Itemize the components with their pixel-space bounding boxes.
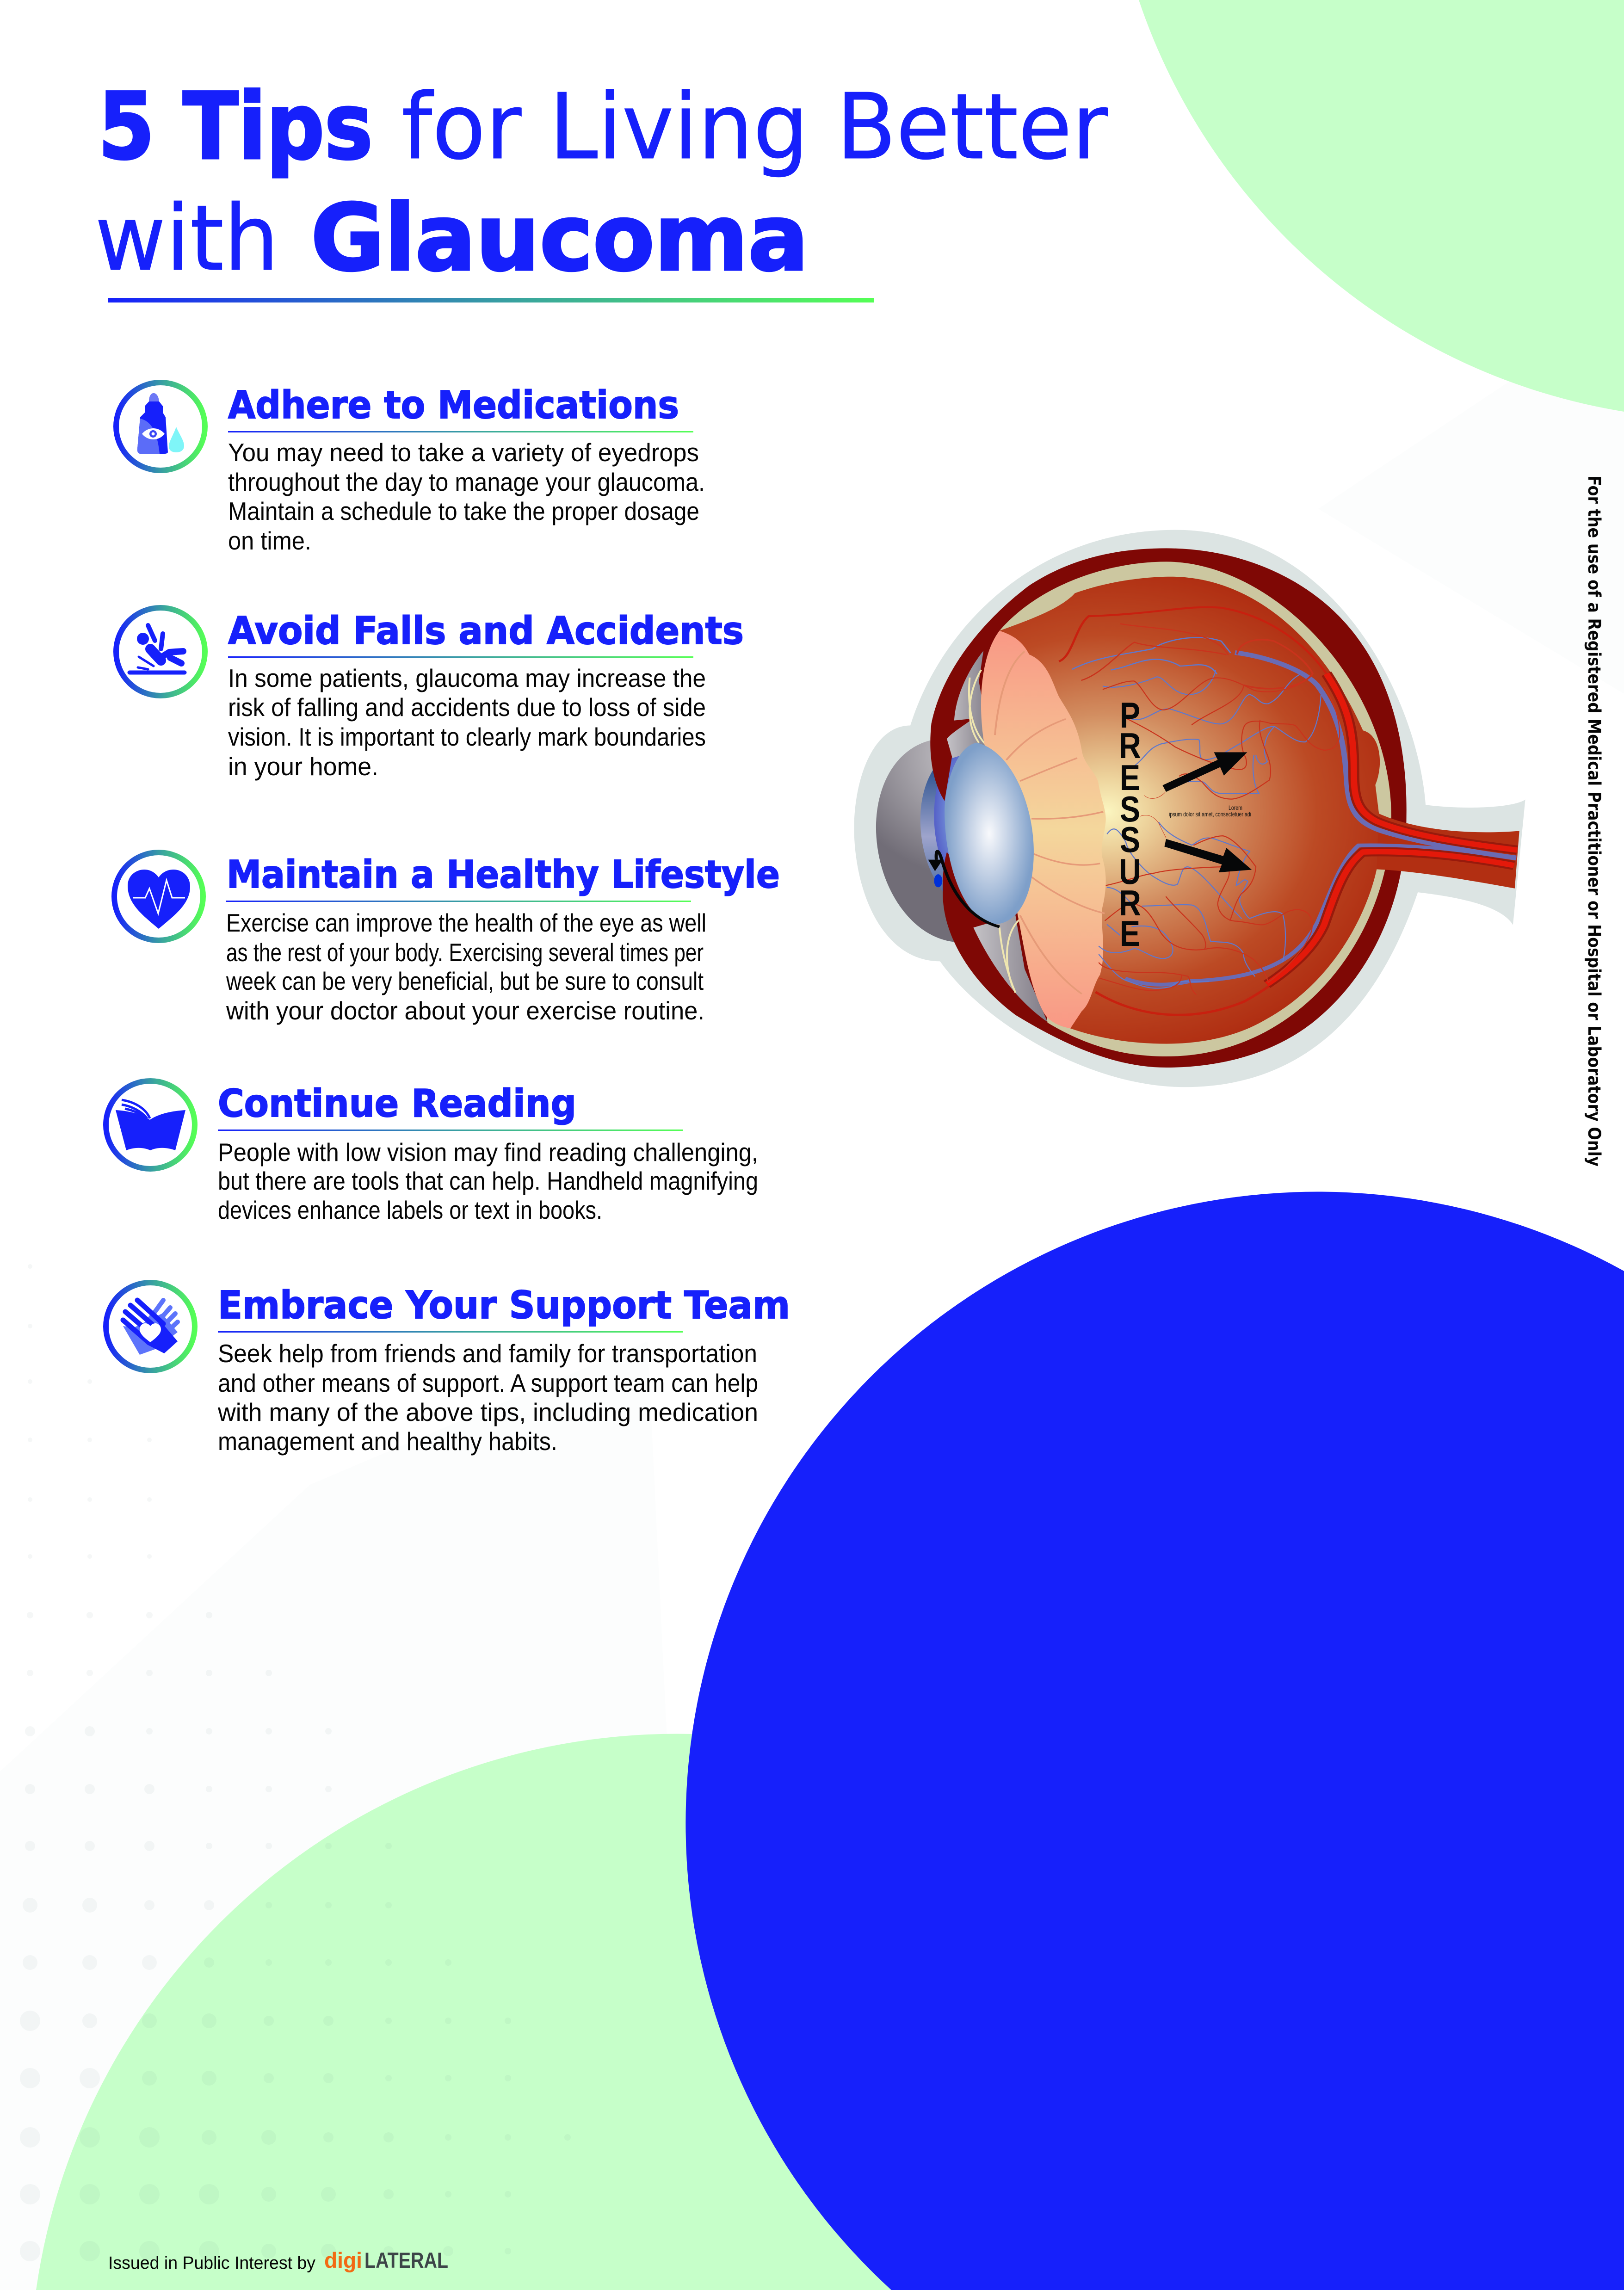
body text: [228, 664, 706, 781]
logo: digiLATERAL: [324, 2248, 448, 2272]
lens: [945, 743, 1034, 924]
curved flow arrow: [936, 851, 1000, 927]
decorative circle: large blue: [685, 1192, 1624, 2290]
icon: hands holding heart: [106, 1283, 195, 1370]
blue dot: [934, 874, 942, 887]
ciliary folds: [995, 651, 1105, 994]
icon: heart with pulse: [114, 852, 203, 940]
tip 4: continue reading: [106, 1081, 758, 1224]
vertical disclaimer text: For the use of a Registered Medical Practitioner or Hospital or Laboratory Only: [1584, 475, 1604, 1167]
heading rule: [228, 431, 693, 432]
heading: Continue Reading: [218, 1082, 576, 1126]
body text: week can be very beneficial, but be sure to consult: [226, 967, 704, 995]
body text: [218, 1138, 758, 1224]
decorative circle: green top right: [1139, 0, 1624, 412]
decorative circle: green bottom left: [36, 1734, 1318, 2290]
title: 5 Tips: [98, 73, 373, 180]
iris: [920, 750, 1015, 924]
ciliary lower: [973, 915, 1048, 1022]
eye halo: [854, 530, 1525, 1087]
heading: Embrace Your Support Team: [218, 1284, 790, 1327]
body text: Seek help from friends and family for transportation: [218, 1339, 757, 1368]
ciliary body: pink: [981, 631, 1106, 1028]
body text: devices enhance labels or text in books.: [218, 1196, 602, 1224]
body text: You may need to take a variety of eyedrops: [228, 438, 699, 467]
tip 3: maintain a healthy lifestyle: [114, 852, 780, 1025]
main vein upper: [1235, 653, 1516, 858]
body text: management and healthy habits.: [218, 1427, 557, 1456]
heading: Avoid Falls and Accidents: [228, 609, 744, 653]
body text: throughout the day to manage your glaucoma.: [228, 468, 705, 496]
label: lorem: [1169, 804, 1251, 818]
footer credit: [108, 2248, 448, 2273]
tip 2: avoid falls and accidents: [116, 608, 744, 781]
sclera: [930, 548, 1407, 1068]
title: Glaucoma: [311, 185, 809, 291]
icon: open book: [106, 1081, 195, 1169]
title: with: [95, 186, 279, 291]
body text: Maintain a schedule to take the proper dosage: [228, 497, 699, 525]
body text: [226, 908, 706, 1025]
body text: Exercise can improve the health of the eye as well: [226, 908, 706, 937]
top vessels: [1073, 624, 1313, 689]
heading: Maintain a Healthy Lifestyle: [227, 853, 780, 897]
body text: and other means of support. A support team can help: [218, 1369, 758, 1397]
title underline: [108, 298, 874, 302]
ciliary upper: [947, 651, 990, 758]
background: dot grid: [30, 1266, 568, 2251]
body text: with your doctor about your exercise routine.: [226, 996, 704, 1025]
main vein lower: [1125, 846, 1516, 985]
pupil area: [934, 747, 996, 885]
body text: People with low vision may find reading challenging,: [218, 1138, 758, 1167]
icon: eye drop bottle: [116, 383, 205, 470]
retinal vessels: [1099, 671, 1340, 994]
body text: but there are tools that can help. Handheld magnifying: [218, 1167, 758, 1195]
body text: [228, 438, 705, 555]
optic nerve: [1377, 814, 1519, 889]
body text: as the rest of your body. Exercising several times per: [226, 938, 704, 967]
icon: falling person: [116, 608, 205, 696]
body text: vision. It is important to clearly mark boundaries: [228, 722, 706, 751]
logo: digiLATERAL: digi: [324, 2248, 362, 2272]
tip 1: adhere to medications: [116, 383, 705, 555]
body text: in your home.: [228, 752, 378, 781]
suspensory fibres: [969, 670, 1019, 993]
main artery lower: [1095, 852, 1514, 1015]
body text: risk of falling and accidents due to loss of side: [228, 693, 706, 722]
body text: [217, 1339, 758, 1456]
heading rule: [218, 1331, 683, 1333]
main artery upper: [1059, 607, 1517, 850]
retina interior: [1000, 577, 1386, 1044]
pressure arrows: [1162, 752, 1252, 872]
tip 5: embrace your support team: [106, 1283, 790, 1456]
title: [95, 73, 1108, 291]
body text: on time.: [228, 526, 311, 555]
label: lorem: ipsum dolor sit amet, consectetuer adi: [1169, 810, 1251, 818]
logo: digiLATERAL: LATERAL: [364, 2248, 448, 2272]
choroid ring: [1000, 562, 1391, 1056]
heading: Adhere to Medications: [228, 383, 679, 427]
body text: In some patients, glaucoma may increase the: [228, 664, 706, 692]
footer credit: Issued in Public Interest by: [108, 2253, 315, 2273]
label: PRESSURE: PRESSURE: [1119, 695, 1141, 954]
label: lorem: Lorem: [1229, 804, 1242, 811]
body text: with many of the above tips, including medication: [217, 1398, 758, 1426]
eye anatomy illustration: [854, 530, 1525, 1087]
heading rule: [218, 1130, 683, 1131]
cornea: [876, 739, 988, 942]
heading rule: [228, 656, 693, 658]
heading rule: [226, 901, 691, 902]
title: for Living Better: [401, 74, 1108, 180]
flow arrow head: [928, 860, 943, 871]
